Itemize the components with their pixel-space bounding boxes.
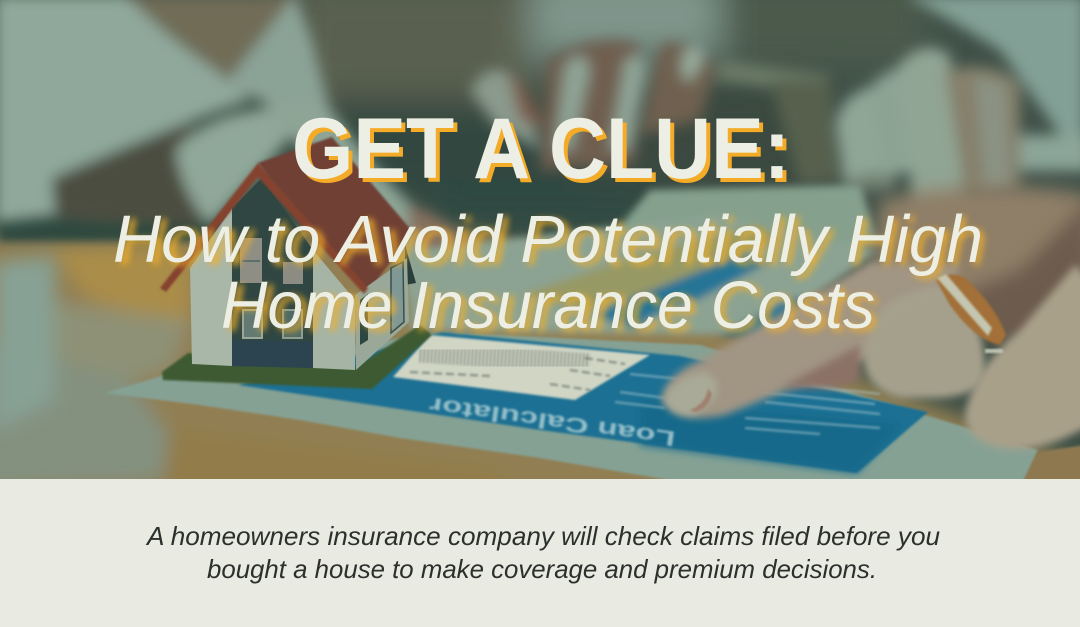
title: Get a Clue: GET A CLUE:	[296, 105, 794, 201]
panel: caption band	[0, 479, 1080, 627]
subtitle: how to avoid: Home Insurance Costs	[221, 268, 875, 343]
panel: hero photo	[0, 0, 1080, 500]
dark upper background	[290, 0, 930, 230]
title: Get a Clue: GET A CLUE:	[292, 101, 790, 197]
caption text: A homeowners insurance company will check claims filed before you	[145, 521, 940, 551]
subtitle: how to avoid: Home Insurance Costs	[227, 271, 879, 346]
roof eaves	[160, 163, 368, 294]
right hand upper fingers	[835, 0, 1080, 215]
background fingers	[470, 40, 840, 185]
windows	[240, 238, 262, 283]
printed label on document: Loan Calculator	[428, 393, 677, 450]
icon: model house	[160, 137, 432, 389]
caption text: bought a house to make coverage and premium decisions.	[207, 554, 877, 584]
back papers	[410, 185, 880, 335]
subtitle: how to avoid: How to Avoid Potentially High	[119, 205, 987, 280]
caption text	[145, 521, 940, 584]
left hand behind house	[176, 110, 300, 225]
table surface	[0, 232, 1080, 500]
subtitle: how to avoid: How to Avoid Potentially High	[113, 202, 983, 277]
white table card	[393, 335, 650, 400]
gold ring	[936, 274, 1006, 345]
document text lines	[615, 374, 880, 434]
subtitle: how to avoid	[113, 202, 987, 346]
side wall	[355, 258, 409, 370]
lower table wood	[1023, 445, 1080, 482]
right wall	[313, 250, 355, 370]
pointing finger	[662, 262, 960, 418]
roof surface	[258, 137, 413, 292]
paper document	[105, 332, 1038, 482]
hands in foreground	[662, 186, 1080, 449]
far wall shadow	[405, 245, 416, 285]
left wall	[190, 208, 232, 366]
blue section of document	[238, 332, 928, 473]
shirt, left	[0, 0, 478, 320]
right hand lower fingers	[972, 206, 1080, 348]
base	[162, 325, 432, 389]
dark front	[232, 180, 313, 342]
